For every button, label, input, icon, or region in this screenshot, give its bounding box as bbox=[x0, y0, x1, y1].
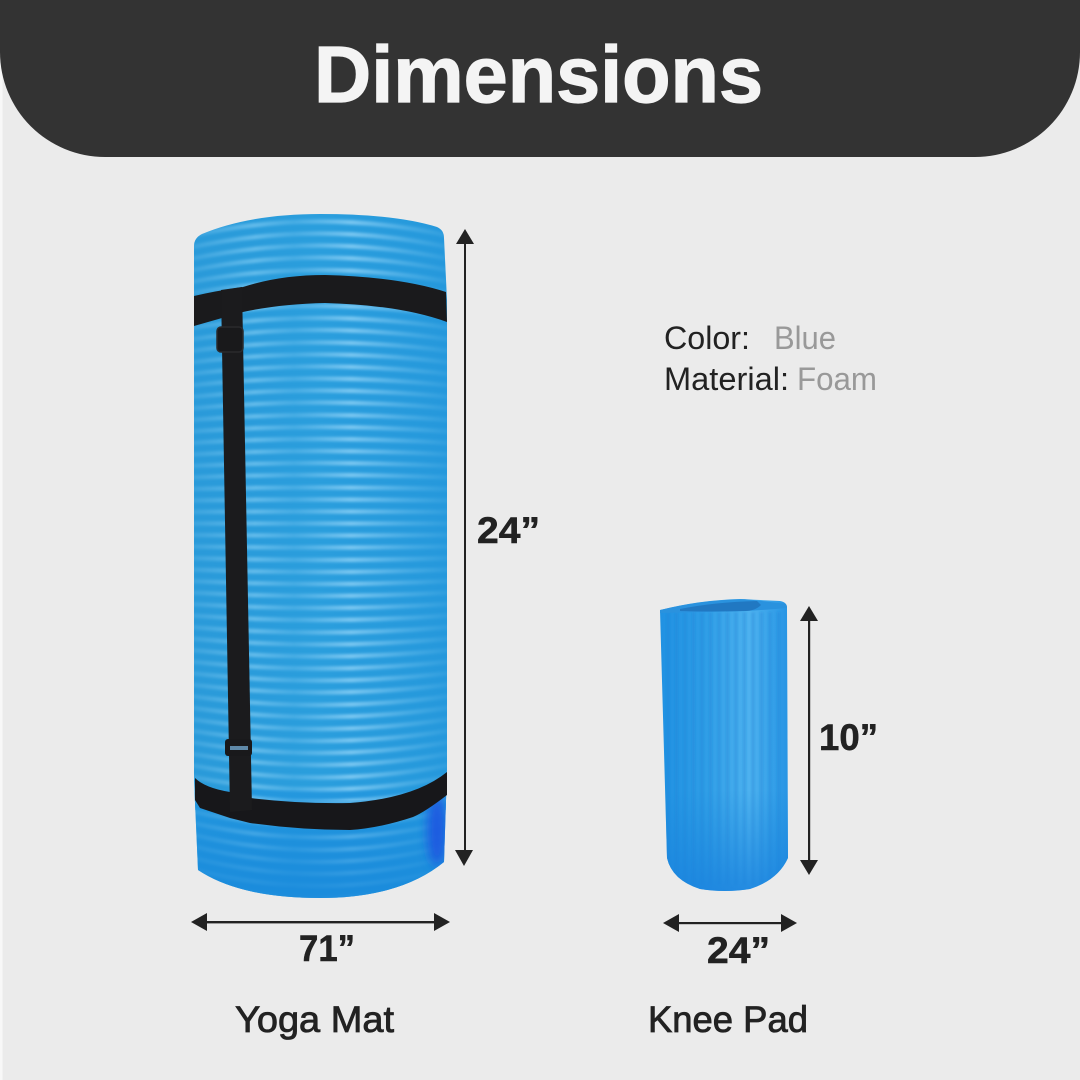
buckle bottom bbox=[225, 739, 252, 756]
arrow: yoga mat height bbox=[455, 229, 474, 866]
top strap bbox=[194, 275, 447, 326]
bottom strap bbox=[195, 772, 447, 830]
dimension labels: 24” bbox=[477, 510, 540, 551]
vertical strap bbox=[221, 287, 252, 812]
arrow: yoga mat width bbox=[191, 913, 450, 931]
specs: Material: bbox=[664, 361, 789, 397]
dimension labels: 71” bbox=[299, 928, 355, 969]
dimension labels: 10” bbox=[819, 717, 878, 758]
product names bbox=[235, 999, 808, 1040]
title: Dimensions bbox=[314, 30, 763, 119]
product names: Yoga Mat bbox=[235, 999, 395, 1040]
specs: Color: bbox=[664, 320, 750, 356]
specs bbox=[664, 320, 877, 397]
yoga mat bbox=[190, 210, 450, 900]
product names: Knee Pad bbox=[648, 999, 808, 1040]
dimension labels bbox=[299, 510, 878, 971]
buckle top bbox=[217, 327, 243, 352]
specs: Blue bbox=[774, 320, 836, 356]
header banner bbox=[0, 0, 1080, 157]
specs: Foam bbox=[797, 361, 877, 397]
dimension labels: 24” bbox=[707, 930, 770, 971]
knee pad bbox=[660, 599, 788, 891]
arrow: knee pad height bbox=[800, 606, 818, 875]
arrow: knee pad width bbox=[663, 914, 797, 932]
